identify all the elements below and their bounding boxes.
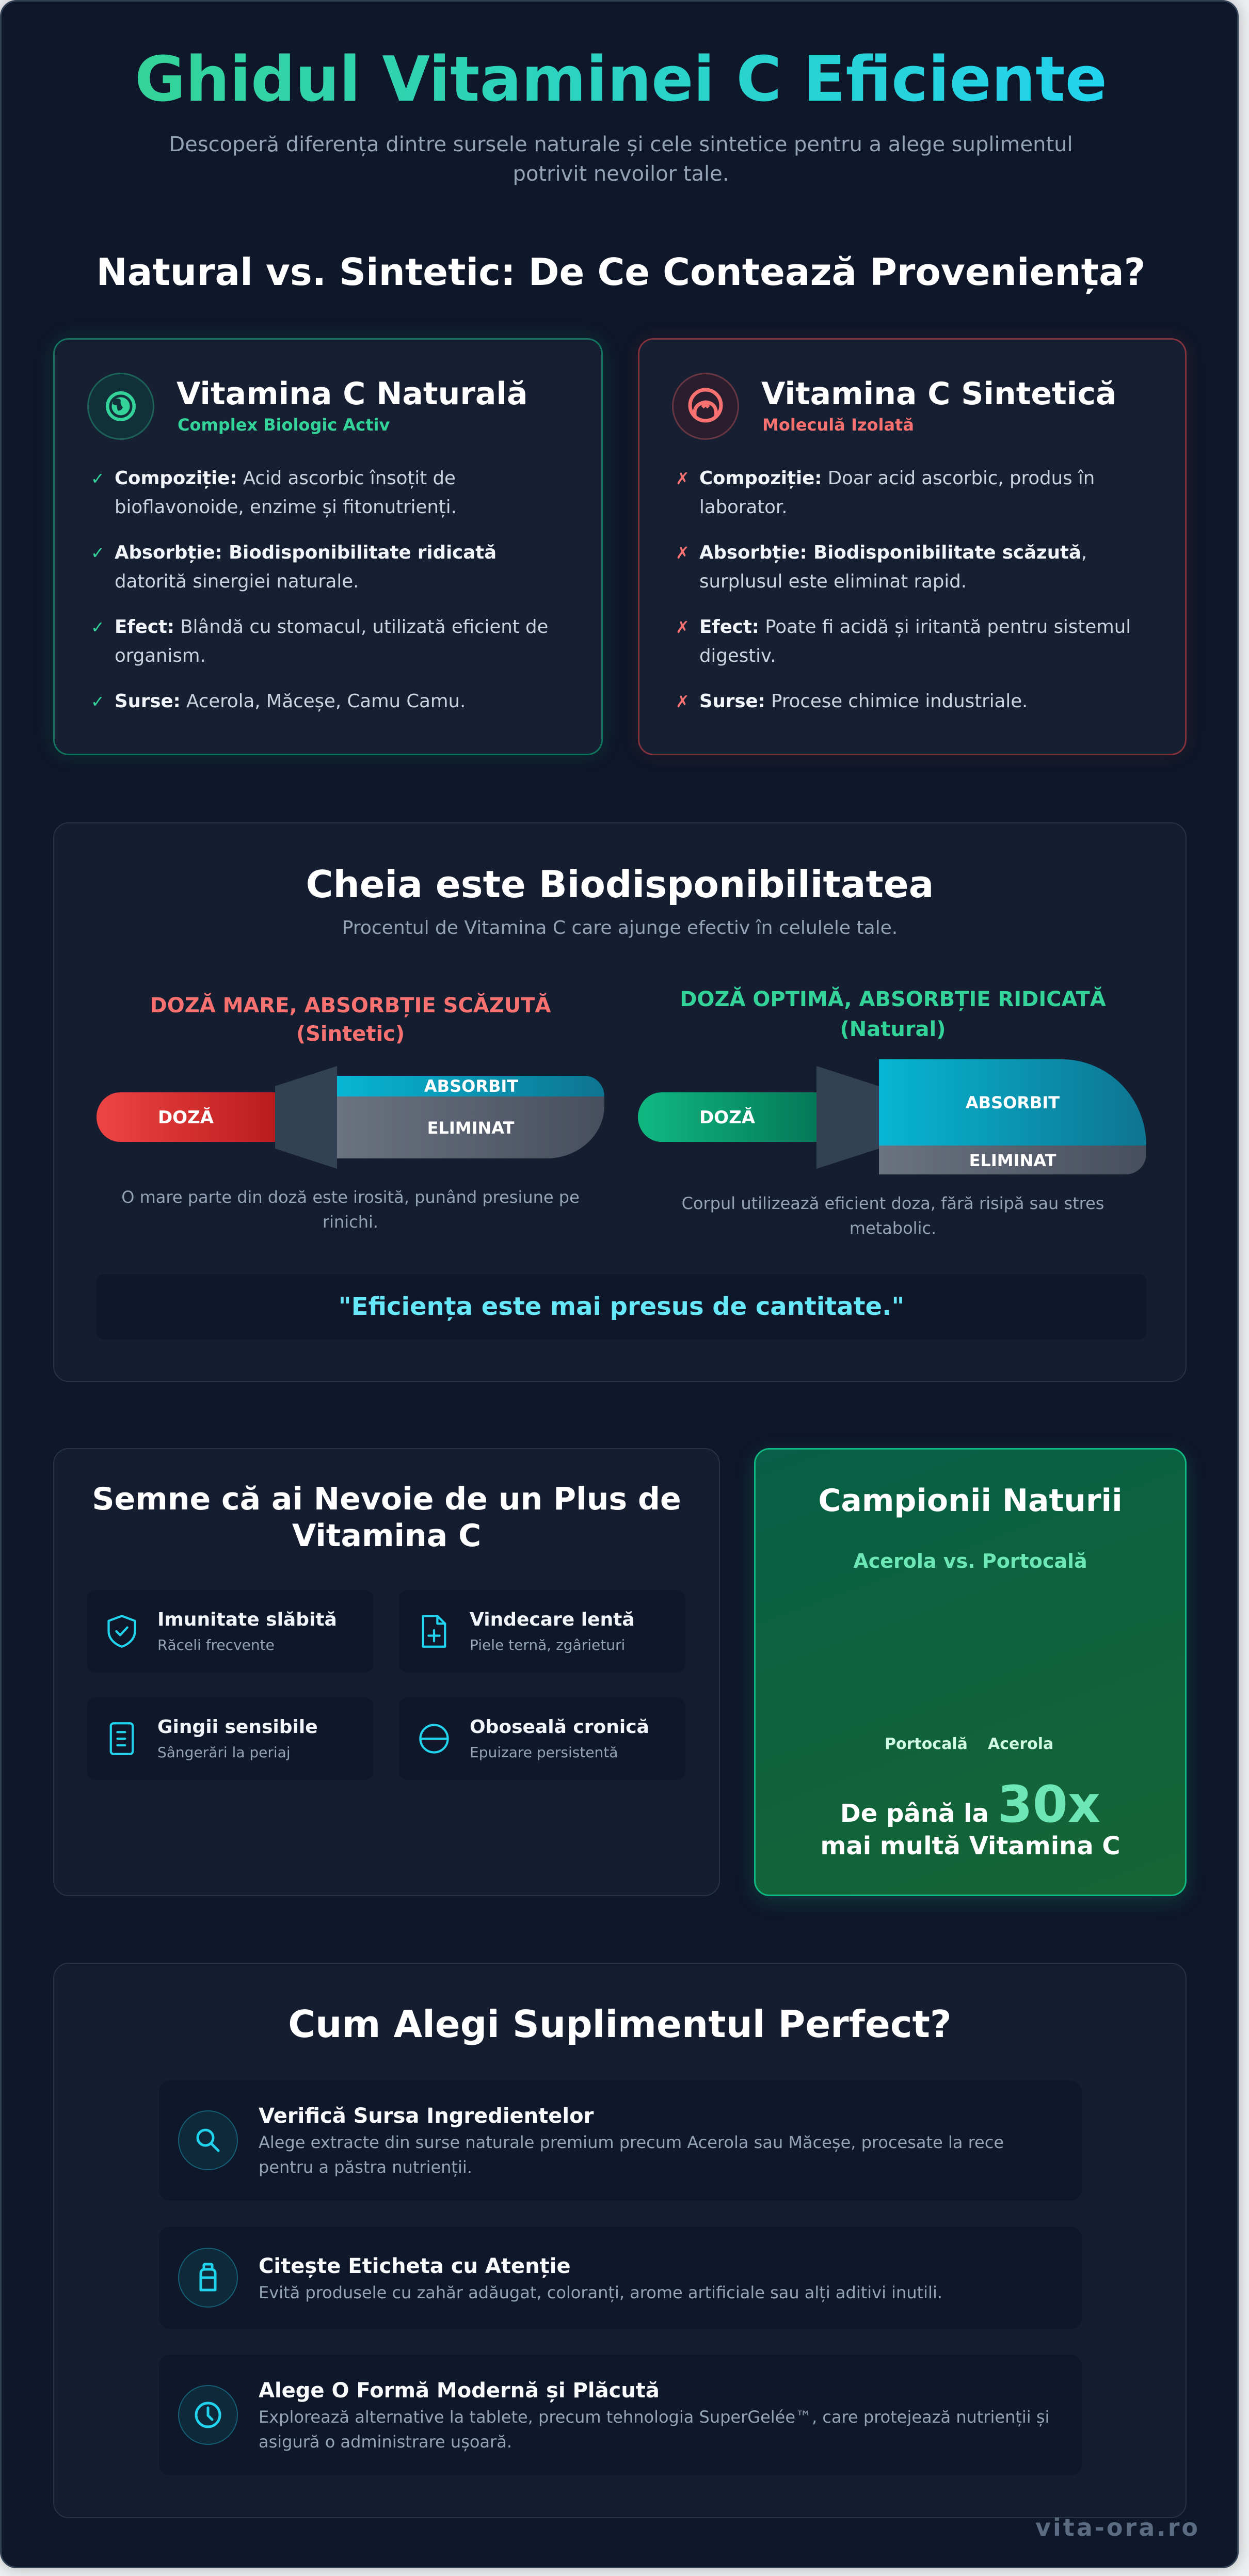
sign: healing: Piele ternă, zgârieturi (470, 1636, 625, 1653)
list: natural: bioflavonoide, enzime și fitonutrienți. (115, 497, 457, 518)
step 2 (159, 2227, 1082, 2329)
panel: natural vitamin C: Surse: Acerola, Măceșe, Camu Camu. (115, 691, 466, 712)
sign: fatigue: Oboseală cronică (470, 1716, 649, 1738)
heading: Semne că ai Nevoie de un Plus de (92, 1481, 681, 1517)
label: synthetic: (Sintetic) (296, 1022, 405, 1046)
sign: gums: Gingii sensibile (157, 1716, 318, 1738)
step 3: Alege O Formă Modernă și Plăcută (259, 2379, 660, 2403)
panel: natural vitamin C: Absorbție: Biodisponibilitate ridicată (115, 542, 497, 563)
step 1: pentru a păstra nutrienții. (259, 2157, 472, 2177)
natural flow: ELIMINAT (969, 1151, 1056, 1170)
list: synthetic: laborator. (699, 497, 787, 518)
list: natural: Compoziție: Acid ascorbic însoțit de (115, 468, 456, 489)
label: natural (680, 987, 1106, 1041)
synthetic flow: DOZĂ (158, 1107, 214, 1128)
title: Ghidul Vitaminei C Eficiente (135, 44, 1107, 116)
step 3 (159, 2355, 1082, 2475)
sign: gums: Sângerări la periaj (157, 1744, 291, 1761)
panel: natural vitamin C (53, 338, 603, 755)
caption: natural: metabolic. (850, 1218, 936, 1238)
panel: synthetic vitamin C (638, 338, 1187, 755)
panel: synthetic vitamin C: ✗ (676, 469, 690, 488)
panel: natural vitamin C: organism. (115, 645, 206, 666)
heading: natural vs sintetic: Natural vs. Sintetic: De Ce Contează Proveniența? (97, 250, 1145, 294)
panel: synthetic vitamin C: Absorbție: Biodisponibilitate scăzută, (699, 542, 1087, 563)
step 1: Alege extracte din surse naturale premium precum Acerola sau Măceșe, procesate la rece (259, 2133, 1004, 2152)
natural flow (638, 1059, 1146, 1174)
panel: synthetic vitamin C: Surse: Procese chimice industriale. (699, 691, 1028, 712)
step 2: Citește Eticheta cu Atenție (259, 2254, 571, 2278)
label: synthetic: DOZĂ MARE, ABSORBȚIE SCĂZUTĂ (150, 994, 551, 1017)
step 1 (159, 2080, 1082, 2201)
panel: natural vitamin C: datorită sinergiei naturale. (115, 571, 359, 592)
natural flow: DOZĂ (699, 1107, 756, 1128)
sign: healing: Vindecare lentă (470, 1609, 635, 1630)
heading: Cum Alegi Suplimentul Perfect? (288, 2002, 952, 2046)
step 1: Verifică Sursa Ingredientelor (259, 2104, 594, 2128)
list: synthetic: Compoziție: Doar acid ascorbic, produs în (699, 468, 1095, 489)
icon: search (178, 2110, 238, 2170)
subtitle: Acerola vs. Portocală (853, 1550, 1087, 1572)
sign: healing (399, 1590, 685, 1673)
caption: natural (682, 1194, 1104, 1238)
panel: bioavailability (53, 822, 1187, 1382)
sign: gums (87, 1697, 373, 1780)
panel: natural vitamin C: ✓ (91, 543, 105, 563)
panel: natural vitamin C: Efect: Blândă cu stomacul, utilizată eficient de (115, 616, 548, 638)
icon: synthetic (672, 373, 739, 440)
subtitle (169, 133, 1073, 186)
panel: synthetic vitamin C: ✗ (676, 543, 690, 563)
stat: 30x: De până la 30x (840, 1775, 1100, 1834)
synthetic flow: ABSORBIT (424, 1076, 518, 1096)
heading: Vitamina C (292, 1518, 481, 1554)
panel: synthetic vitamin C: surplusul este eliminat rapid. (699, 571, 967, 592)
panel: deficiency signs (53, 1448, 720, 1896)
card subtitle: Moleculă Izolată (762, 415, 914, 435)
label: natural: (Natural) (840, 1017, 946, 1041)
label: synthetic (150, 993, 551, 1046)
footer: brand: vita-ora.ro (1035, 2514, 1200, 2541)
sign: immunity: Răceli frecvente (157, 1636, 275, 1653)
icon: bottle (178, 2248, 238, 2308)
card subtitle: Complex Biologic Activ (178, 415, 390, 435)
list: natural (91, 468, 457, 518)
sign: immunity: Imunitate slăbită (157, 1609, 337, 1630)
panel: natural vitamin C: ✓ (91, 469, 105, 488)
panel: natural vitamin C: ✓ (91, 617, 105, 637)
heading: Cheia este Biodisponibilitatea (306, 863, 934, 906)
panel: synthetic vitamin C: ✗ (676, 617, 690, 637)
synthetic flow (97, 1066, 604, 1169)
panel: synthetic vitamin C: ✗ (676, 692, 690, 711)
sign: fatigue (399, 1697, 685, 1780)
panel: synthetic vitamin C: Efect: Poate fi acidă și iritantă pentru sistemul (699, 616, 1131, 638)
caption: synthetic: rinichi. (323, 1212, 378, 1232)
synthetic flow: ELIMINAT (427, 1118, 515, 1138)
quote: "Eficiența este mai presus de cantitate." (339, 1292, 904, 1321)
caption: synthetic: O mare parte din doză este irosită, punând presiune pe (121, 1187, 580, 1207)
chart labels: Portocală (885, 1735, 968, 1753)
subtitle: Procentul de Vitamina C care ajunge efectiv în celulele tale. (342, 917, 898, 939)
stat caption: mai multă Vitamina C (820, 1832, 1120, 1861)
step 2: Evită produsele cu zahăr adăugat, coloranți, arome artificiale sau alți aditivi inutili. (259, 2283, 942, 2302)
panel: natural vitamin C: ✓ (91, 692, 105, 711)
natural flow: ABSORBIT (966, 1093, 1060, 1112)
panel: nature champions (754, 1448, 1187, 1896)
caption: synthetic (121, 1187, 580, 1232)
card title: Vitamina C Naturală (177, 376, 527, 412)
sign: fatigue: Epuizare persistentă (470, 1744, 618, 1761)
card title: Vitamina C Sintetică (761, 376, 1116, 412)
step 3: asigură o administrare ușoară. (259, 2432, 512, 2452)
chart labels (885, 1735, 1053, 1753)
quote (97, 1274, 1146, 1340)
heading (92, 1481, 681, 1554)
subtitle: Descoperă diferența dintre sursele naturale și cele sintetice pentru a alege suplimentul (169, 133, 1073, 156)
panel: how to choose (53, 1963, 1187, 2518)
caption: natural: Corpul utilizează eficient doza, fără risipă sau stres (682, 1194, 1104, 1213)
icon: natural (87, 373, 154, 440)
step 3: Explorează alternative la tablete, precum tehnologia SuperGelée™, care protejează nutrienții și (259, 2407, 1049, 2427)
panel: synthetic vitamin C: digestiv. (699, 645, 776, 666)
subtitle: potrivit nevoilor tale. (513, 162, 729, 186)
icon: clock (178, 2385, 238, 2445)
diagram: absorption flows (97, 1059, 1146, 1174)
heading: Campionii Naturii (818, 1483, 1123, 1519)
sign: immunity (87, 1590, 373, 1673)
label: natural: DOZĂ OPTIMĂ, ABSORBȚIE RIDICATĂ (680, 988, 1106, 1011)
chart labels: Acerola (988, 1735, 1053, 1753)
list: synthetic (676, 468, 1095, 518)
